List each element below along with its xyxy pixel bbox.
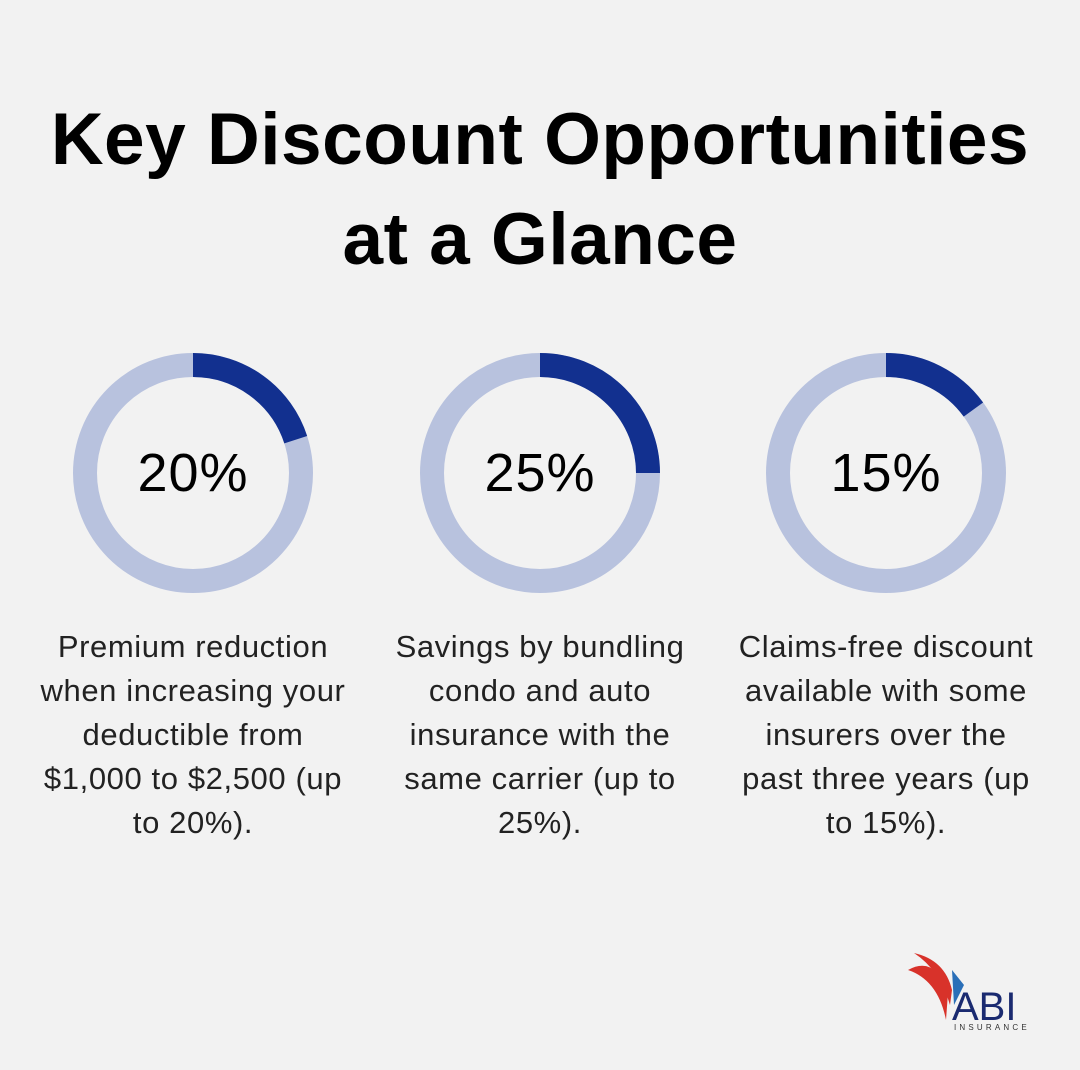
text: bundling: Savings by bundling [396,629,684,664]
text: deductible: Premium reduction [58,629,328,664]
text: bundling: same carrier (up to [404,761,676,796]
donut: 25% [420,353,660,593]
text: bundling: 25%). [498,805,582,840]
text: claims-free: available with some [745,673,1027,708]
text: claims-free [739,629,1033,840]
text: deductible: deductible from [83,717,303,752]
logo [908,953,1030,1032]
text: claims-free: insurers over the [765,717,1007,752]
text: claims-free: to 15%). [826,805,946,840]
text: claims-free: Claims-free discount [739,629,1033,664]
text: bundling: condo and auto [429,673,651,708]
donut: 25%: 25% [484,443,596,503]
text: deductible: $1,000 to $2,500 (up [44,761,342,796]
title [51,99,1029,280]
text: deductible: to 20%). [133,805,253,840]
donut: 20%: 20% [137,443,249,503]
text: claims-free: past three years (up [742,761,1030,796]
donut: 15% [766,353,1006,593]
title: at a Glance [342,199,738,280]
title: Key Discount Opportunities [51,99,1029,180]
logo: INSURANCE [954,1023,1030,1032]
logo: ABI [952,985,1016,1029]
text: deductible: when increasing your [41,673,345,708]
donut: 15%: 15% [830,443,942,503]
text: bundling: insurance with the [410,717,670,752]
text: bundling [396,629,684,840]
donut: 20% [73,353,313,593]
text: deductible [40,629,345,840]
